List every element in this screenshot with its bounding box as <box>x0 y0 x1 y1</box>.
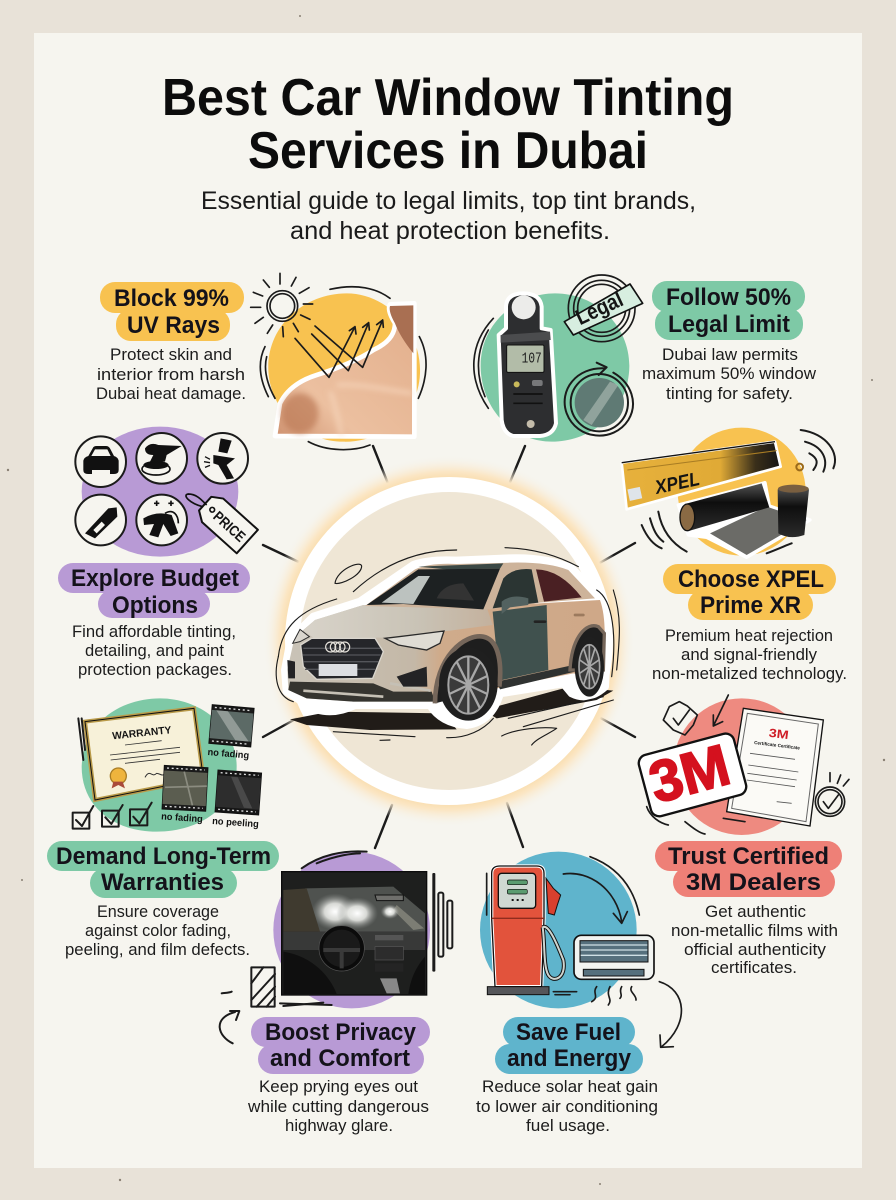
panel: long-term warranties <box>47 698 279 959</box>
heading pills: Warranties <box>101 869 224 896</box>
heading pills: Boost Privacy <box>265 1019 417 1046</box>
illustration: interior at night <box>220 851 452 1043</box>
car illustration <box>276 548 619 745</box>
heading pills: Trust Certified <box>668 843 829 870</box>
body text <box>247 1078 429 1135</box>
illustration: warranty certificate and film swatches: WARRANTY <box>112 725 172 742</box>
heading pills: 3M Dealers <box>686 869 821 896</box>
car roof and windows <box>365 563 595 609</box>
car body <box>287 600 605 702</box>
heading pills <box>663 564 836 620</box>
heading pills: Legal Limit <box>668 311 790 338</box>
icon: sprayer <box>143 513 178 537</box>
car wheels <box>435 636 500 703</box>
body text: maximum 50% window <box>642 365 816 383</box>
body text: tinting for safety. <box>666 385 793 403</box>
body text: Find affordable tinting, <box>72 623 236 641</box>
illustration: 3M card and certificate: 3M <box>768 726 790 742</box>
panel: fuel and energy <box>476 852 681 1135</box>
body text: Get authentic <box>705 903 806 921</box>
illustration: sun and shoulder <box>251 273 426 450</box>
panel: certified 3M dealers <box>637 695 849 977</box>
panel: privacy and comfort <box>220 851 452 1135</box>
heading pills <box>58 563 250 619</box>
body text: Ensure coverage <box>97 903 219 921</box>
price tag: PRICE <box>210 509 248 546</box>
heading pills: and Comfort <box>270 1045 410 1072</box>
heading pills <box>47 841 279 898</box>
body text <box>652 627 847 683</box>
body text: highway glare. <box>285 1117 393 1135</box>
heading pills <box>251 1017 430 1074</box>
body text: detailing, and paint <box>85 642 224 660</box>
panel: budget options <box>58 427 258 679</box>
heading pills <box>495 1017 643 1074</box>
body text: protection packages. <box>78 661 232 679</box>
central hub: connector spokes <box>263 446 635 848</box>
heading pills: Follow 50% <box>666 284 791 311</box>
body text <box>671 903 838 977</box>
illustration: light meter, legal stamp, tint disc <box>474 275 643 442</box>
illustration: warranty certificate and film swatches <box>73 698 261 832</box>
body text: peeling, and film defects. <box>65 941 250 959</box>
heading pills: Options <box>112 592 198 619</box>
illustration: service icons and price tag <box>75 427 258 557</box>
body text: official authenticity <box>684 941 827 959</box>
body text: and signal-friendly <box>681 646 818 664</box>
illustration: fuel pump and air conditioner <box>480 852 681 1047</box>
title: Services in Dubai <box>248 122 648 180</box>
icon: spray gun <box>213 438 235 479</box>
subtitle: and heat protection benefits. <box>290 217 610 245</box>
body text: non-metallic films with <box>671 922 838 940</box>
body text <box>96 346 246 403</box>
panel: legal limit <box>474 275 816 442</box>
body text: interior from harsh <box>97 366 245 384</box>
central hub: glowing circle <box>263 455 635 827</box>
car sketch lines <box>276 548 619 745</box>
body text: against color fading, <box>85 922 231 940</box>
illustration: warranty certificate and film swatches: no fading <box>207 747 250 762</box>
car grille and lamps <box>301 638 383 679</box>
illustration: warranty certificate and film swatches: no fading <box>161 811 203 825</box>
body text: Premium heat rejection <box>665 627 833 645</box>
body text <box>72 623 236 679</box>
illustration: 3M card and certificate: 3M <box>643 732 737 816</box>
heading pills: Explore Budget <box>71 565 239 592</box>
body text <box>65 903 250 959</box>
price tag <box>195 492 258 553</box>
heading pills: Prime XR <box>700 592 801 619</box>
body text: while cutting dangerous <box>247 1098 429 1116</box>
body text: Dubai heat damage. <box>96 385 246 403</box>
heading pills: Choose XPEL <box>678 566 824 593</box>
body text <box>642 346 816 403</box>
icon: polisher <box>145 444 182 462</box>
heading pills: Save Fuel <box>516 1019 621 1046</box>
illustration: 3M card and certificate <box>637 695 849 835</box>
body text: certificates. <box>711 959 797 977</box>
heading pills: and Energy <box>507 1045 632 1072</box>
icon: tag <box>85 507 117 538</box>
car shadow <box>290 687 613 730</box>
heading pills: Demand Long-Term <box>56 843 271 870</box>
illustration: 3M card and certificate: Certificate Certificate <box>754 740 801 751</box>
panel: XPEL Prime XR <box>622 428 847 683</box>
body text: non-metalized technology. <box>652 665 847 683</box>
body text: to lower air conditioning <box>476 1098 658 1116</box>
panel: block UV rays <box>96 273 426 450</box>
body text <box>476 1078 658 1135</box>
body text: Reduce solar heat gain <box>482 1078 658 1096</box>
icon: car <box>83 446 119 474</box>
illustration: warranty certificate and film swatches: no peeling <box>212 816 259 830</box>
body text: Dubai law permits <box>662 346 798 364</box>
illustration: light meter, legal stamp, tint disc: 107 <box>522 352 542 368</box>
title: Best Car Window Tinting <box>162 69 734 127</box>
body text: Protect skin and <box>110 346 232 364</box>
car white outline <box>285 558 608 725</box>
heading pills: UV Rays <box>127 312 220 339</box>
title <box>162 69 734 180</box>
subtitle <box>201 187 696 245</box>
illustration: light meter, legal stamp, tint disc: Legal <box>572 286 627 330</box>
heading pills <box>655 841 842 897</box>
heading pills <box>652 281 805 340</box>
heading pills: Block 99% <box>114 285 229 312</box>
body text: Keep prying eyes out <box>259 1078 418 1096</box>
subtitle: Essential guide to legal limits, top tint brands, <box>201 187 696 215</box>
illustration: XPEL box and film rolls <box>622 428 835 557</box>
body text: fuel usage. <box>526 1117 610 1135</box>
illustration: XPEL box and film rolls: XPEL <box>652 469 702 499</box>
heading pills <box>100 282 244 341</box>
